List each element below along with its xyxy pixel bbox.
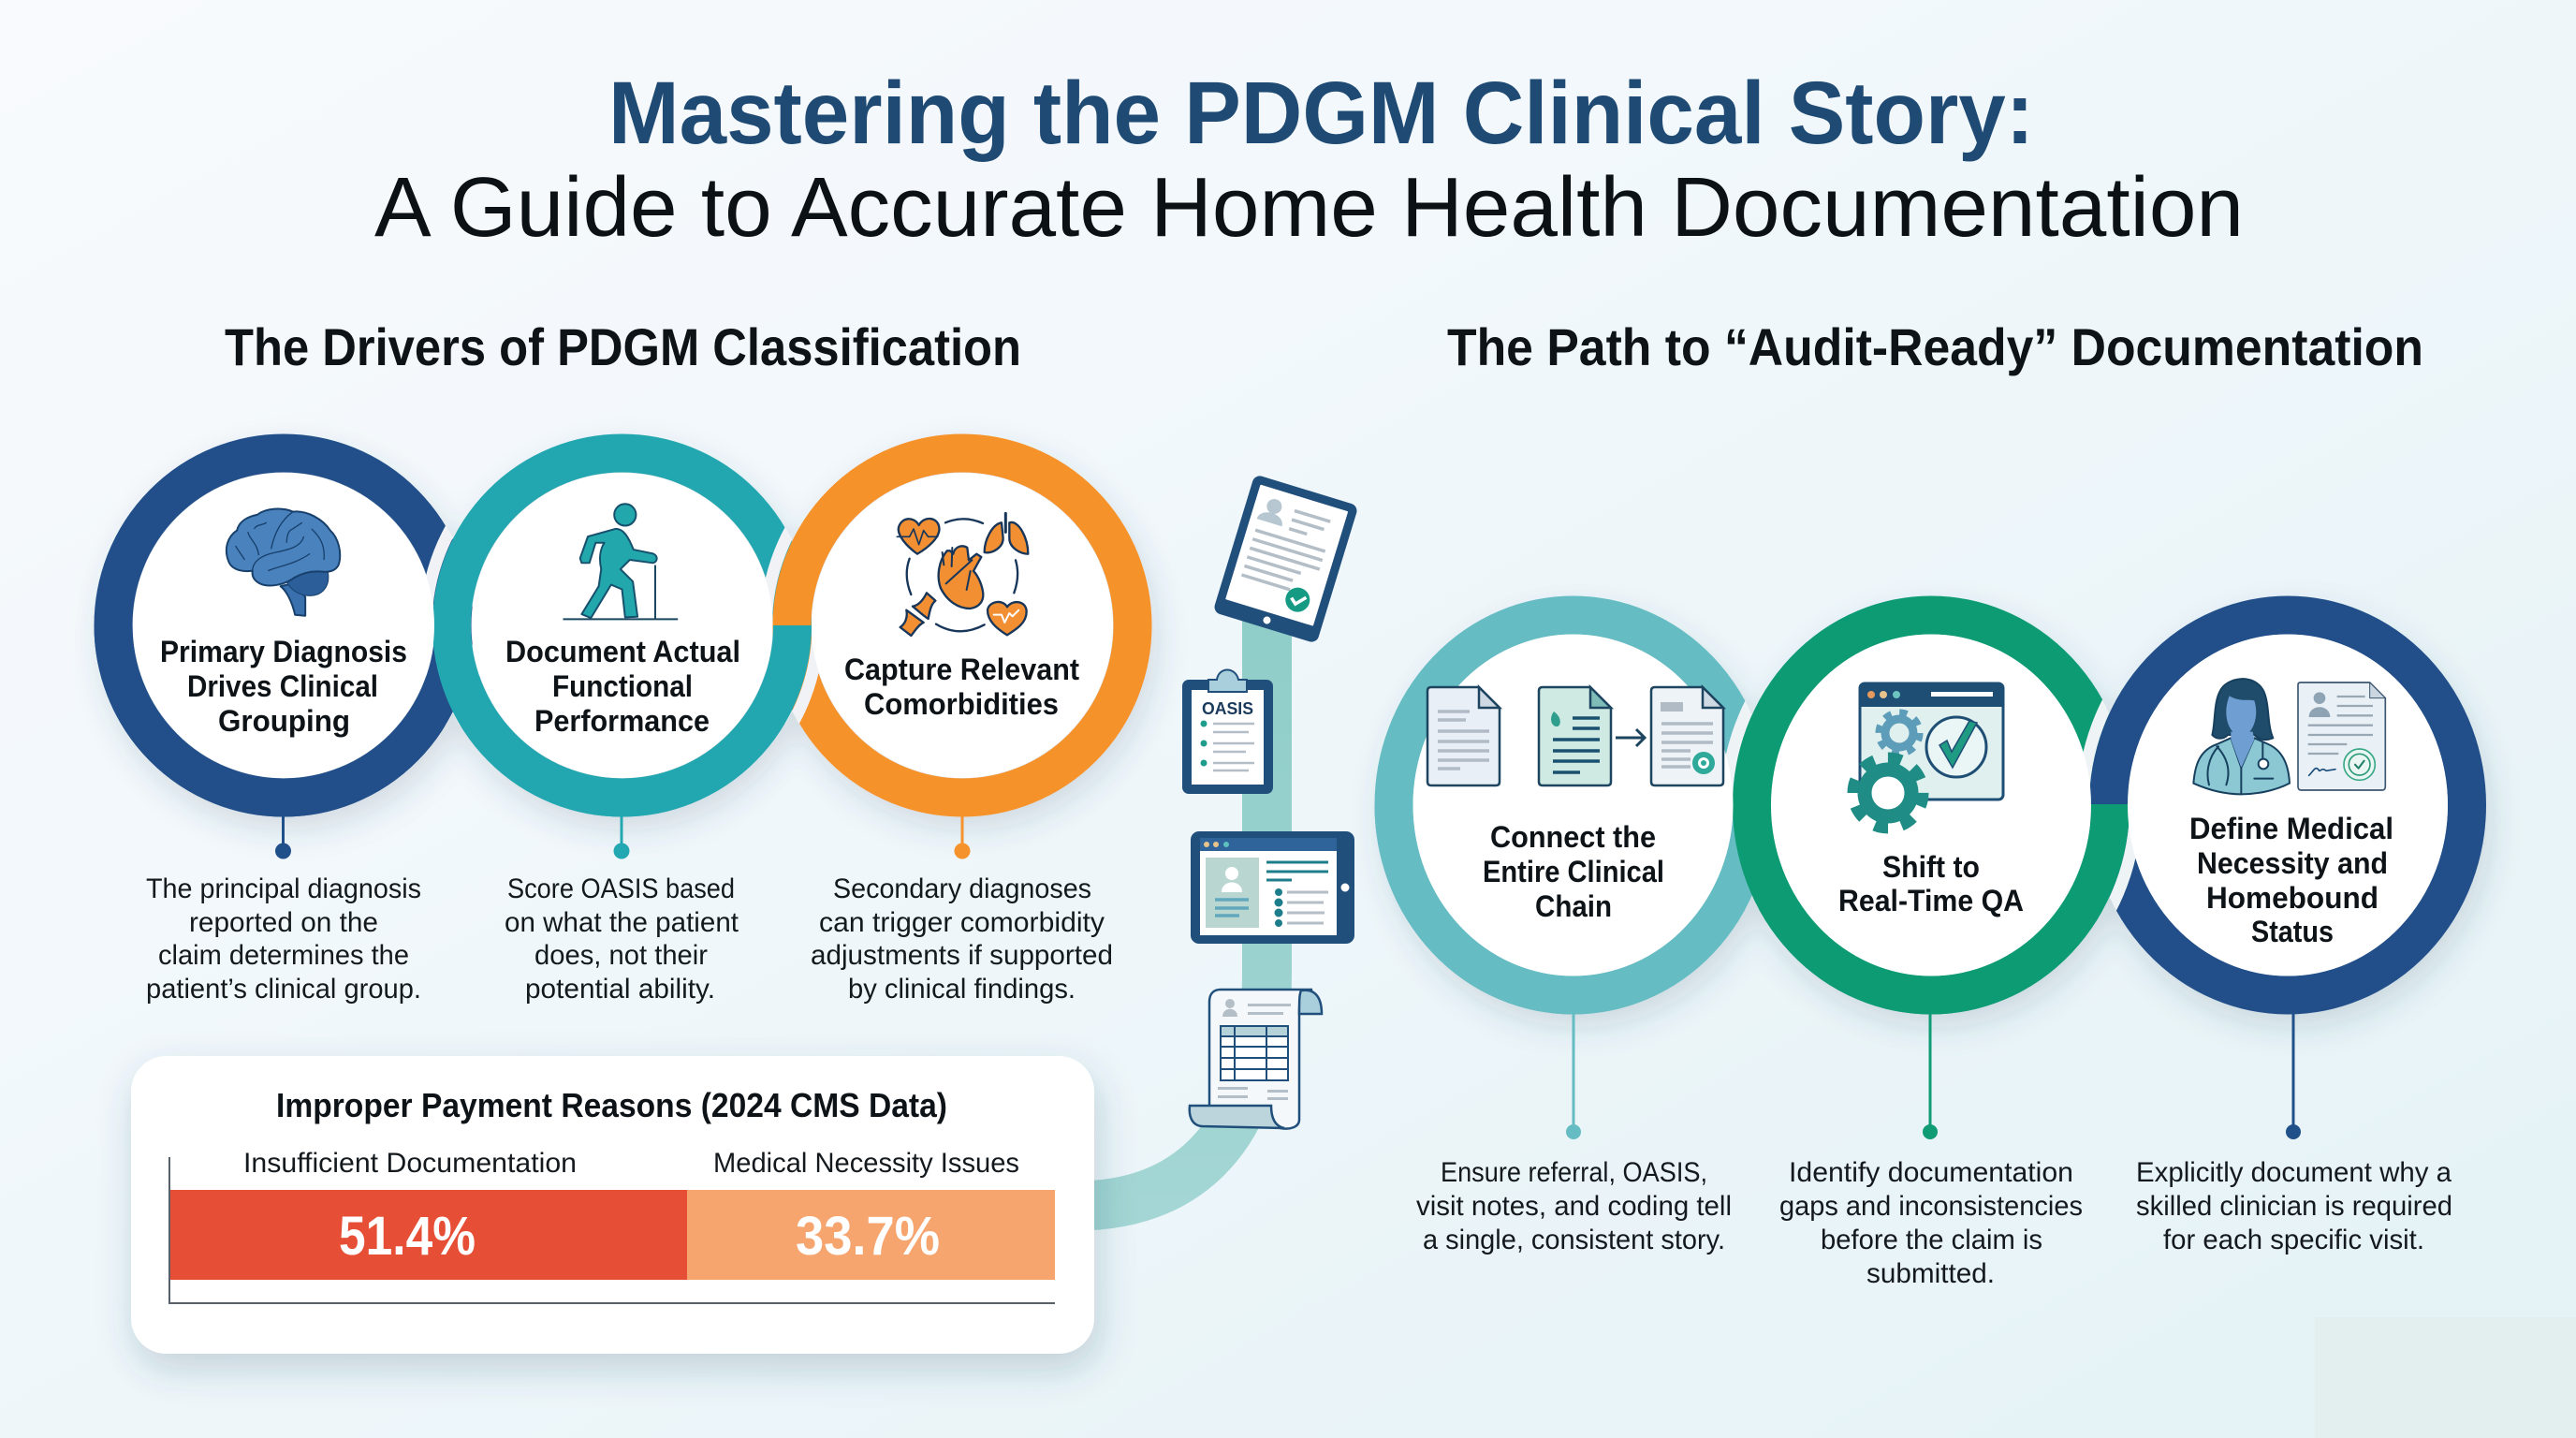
title: A Guide to Accurate Home Health Documentation — [374, 161, 2244, 255]
stem and dot — [614, 814, 629, 859]
step 3: medical necessity — [2136, 679, 2452, 1255]
panel: improper payment chart — [131, 1056, 1094, 1354]
description: gaps and inconsistencies — [1779, 1191, 2083, 1222]
icon: brain — [227, 508, 340, 616]
description: submitted. — [1866, 1258, 1995, 1289]
bar: 51.4% — [169, 1190, 687, 1280]
driver 2: functional performance — [505, 504, 740, 1005]
description: visit notes, and coding tell — [1416, 1191, 1732, 1222]
description — [2136, 1157, 2452, 1255]
value 33.7%: 33.7% — [796, 1206, 940, 1267]
description — [1779, 1157, 2083, 1289]
bar: 33.7% — [687, 1190, 1055, 1280]
heading: Primary Diagnosis — [160, 635, 407, 668]
stem and dot — [955, 814, 970, 859]
heading: Shift to — [1882, 850, 1980, 884]
icon: heart and organs — [897, 513, 1028, 636]
heading — [2189, 812, 2393, 948]
description: on what the patient — [505, 907, 739, 938]
heading: drivers: The Drivers of PDGM Classification — [225, 317, 1021, 376]
heading — [160, 635, 407, 738]
description: a single, consistent story. — [1423, 1225, 1725, 1255]
description: claim determines the — [158, 940, 409, 971]
ring chain: drivers — [88, 427, 1159, 824]
description: patient’s clinical group. — [146, 974, 421, 1005]
heading: Comorbidities — [864, 687, 1059, 721]
description: Secondary diagnoses — [833, 873, 1091, 904]
description: adjustments if supported — [811, 940, 1113, 971]
description: reported on the — [189, 907, 378, 938]
description: for each specific visit. — [2163, 1225, 2424, 1255]
icon: tablet with chart — [1213, 474, 1358, 644]
description: before the claim is — [1821, 1225, 2042, 1255]
heading: Connect the — [1490, 820, 1656, 854]
heading: Capture Relevant — [844, 653, 1079, 686]
title — [374, 64, 2244, 255]
icon: QA window with gears and check — [1853, 682, 2003, 828]
heading: Define Medical — [2189, 812, 2393, 845]
step 2: real-time QA — [1779, 682, 2083, 1289]
label: medical necessity: Medical Necessity Issues — [713, 1148, 1019, 1179]
heading: Homebound — [2206, 881, 2378, 915]
icon: EHR tablet — [1191, 831, 1354, 944]
heading: Status — [2251, 915, 2334, 948]
description — [811, 873, 1113, 1005]
heading: Drives Clinical — [187, 669, 378, 703]
description: does, not their — [534, 940, 708, 971]
axes — [169, 1157, 1055, 1303]
heading: Necessity and — [2197, 846, 2388, 880]
driver 3: comorbidities — [811, 513, 1113, 1005]
description — [146, 873, 421, 1005]
icon: walking figure with cane — [563, 504, 678, 619]
description: Identify documentation — [1789, 1157, 2073, 1188]
description — [505, 873, 739, 1005]
heading: Functional — [552, 669, 693, 703]
driver 1: primary diagnosis — [146, 508, 421, 1005]
icon: clinician with certificate — [2193, 679, 2385, 794]
description — [1416, 1157, 1732, 1255]
stem and dot — [275, 814, 291, 859]
stem and dot — [2286, 1013, 2301, 1139]
value 51.4%: 51.4% — [339, 1206, 476, 1267]
heading — [1483, 820, 1664, 923]
ring chain: audit-ready path — [1368, 590, 2492, 1020]
heading: Entire Clinical — [1483, 855, 1664, 888]
icon: connected documents — [1427, 687, 1723, 785]
icon: claim form scroll — [1190, 990, 1322, 1129]
description: skilled clinician is required — [2136, 1191, 2452, 1222]
stem and dot — [1566, 1013, 1581, 1139]
heading: Real-Time QA — [1838, 884, 2024, 917]
description: Ensure referral, OASIS, — [1441, 1157, 1707, 1188]
chart title: Improper Payment Reasons (2024 CMS Data) — [276, 1086, 947, 1124]
heading: Document Actual — [505, 635, 740, 668]
description: by clinical findings. — [848, 974, 1076, 1005]
heading: Performance — [534, 704, 710, 738]
title: Mastering the PDGM Clinical Story: — [608, 64, 2034, 163]
description: The principal diagnosis — [146, 873, 421, 904]
heading — [844, 653, 1079, 721]
heading — [505, 635, 740, 738]
description: potential ability. — [525, 974, 715, 1005]
label: insufficient documentation: Insufficient Documentation — [243, 1148, 577, 1179]
heading: Grouping — [218, 704, 350, 738]
icon: OASIS clipboard: OASIS — [1202, 699, 1253, 718]
description: can trigger comorbidity — [819, 907, 1105, 938]
step 1: clinical chain — [1416, 687, 1732, 1255]
stem and dot — [1923, 1013, 1938, 1139]
heading: Chain — [1535, 889, 1612, 923]
description: Score OASIS based — [507, 873, 735, 904]
heading: audit-ready path: The Path to “Audit-Ready” Documentation — [1447, 317, 2423, 376]
icon: OASIS clipboard — [1182, 670, 1273, 794]
description: Explicitly document why a — [2136, 1157, 2452, 1188]
heading — [1838, 850, 2024, 917]
connector band — [1076, 609, 1267, 1206]
